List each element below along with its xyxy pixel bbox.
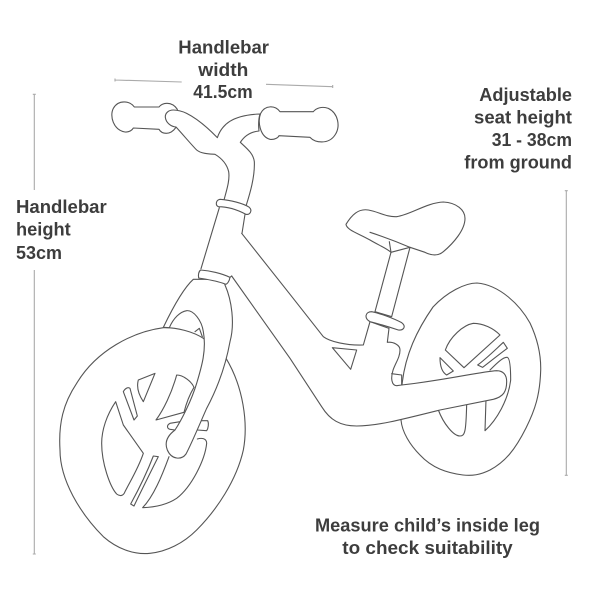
measure line: handlebar height bbox=[33, 94, 36, 554]
stem bbox=[165, 110, 260, 206]
bike frame and seat bbox=[232, 202, 507, 426]
fork bbox=[163, 279, 232, 458]
label: handlebar height bbox=[16, 197, 107, 263]
label: handlebar width: 41.5cm bbox=[193, 82, 253, 102]
label: handlebar width: width bbox=[197, 60, 248, 80]
label: seat height bbox=[464, 85, 572, 172]
head tube, handlebars and collars bbox=[112, 102, 338, 269]
label: handlebar height: Handlebar bbox=[16, 197, 107, 217]
seat clamp bbox=[366, 312, 404, 330]
left grip bbox=[112, 102, 177, 133]
saddle bbox=[346, 202, 465, 255]
measure line: handlebar width bbox=[115, 78, 333, 88]
note: inside leg bbox=[315, 516, 540, 558]
frame body bbox=[232, 233, 507, 426]
label: handlebar width bbox=[178, 37, 269, 102]
head tube bbox=[201, 208, 245, 269]
label: handlebar height: 53cm bbox=[16, 243, 62, 263]
label: seat height: from ground bbox=[464, 152, 572, 172]
rear wheel bbox=[401, 283, 541, 475]
upper collar bbox=[216, 199, 251, 214]
front wheel bbox=[60, 279, 245, 554]
frame triangle cut-out bbox=[332, 348, 357, 369]
label: seat height: seat height bbox=[474, 107, 572, 127]
label: seat height: Adjustable bbox=[479, 85, 572, 105]
note: inside leg: Measure child’s inside leg bbox=[315, 516, 540, 536]
seat stay detail bbox=[392, 374, 402, 385]
label: handlebar height: height bbox=[16, 220, 71, 240]
note: inside leg: to check suitability bbox=[342, 538, 513, 558]
right grip bbox=[259, 107, 338, 142]
label: seat height: 31 - 38cm bbox=[492, 130, 572, 150]
seat post bbox=[375, 247, 410, 317]
wheel spokes bbox=[102, 373, 208, 508]
measure line: seat height bbox=[565, 191, 568, 475]
saddle underside line bbox=[370, 232, 410, 252]
fork inner tab bbox=[195, 328, 202, 337]
lower collar bbox=[198, 270, 232, 284]
label: handlebar width: Handlebar bbox=[178, 37, 269, 57]
